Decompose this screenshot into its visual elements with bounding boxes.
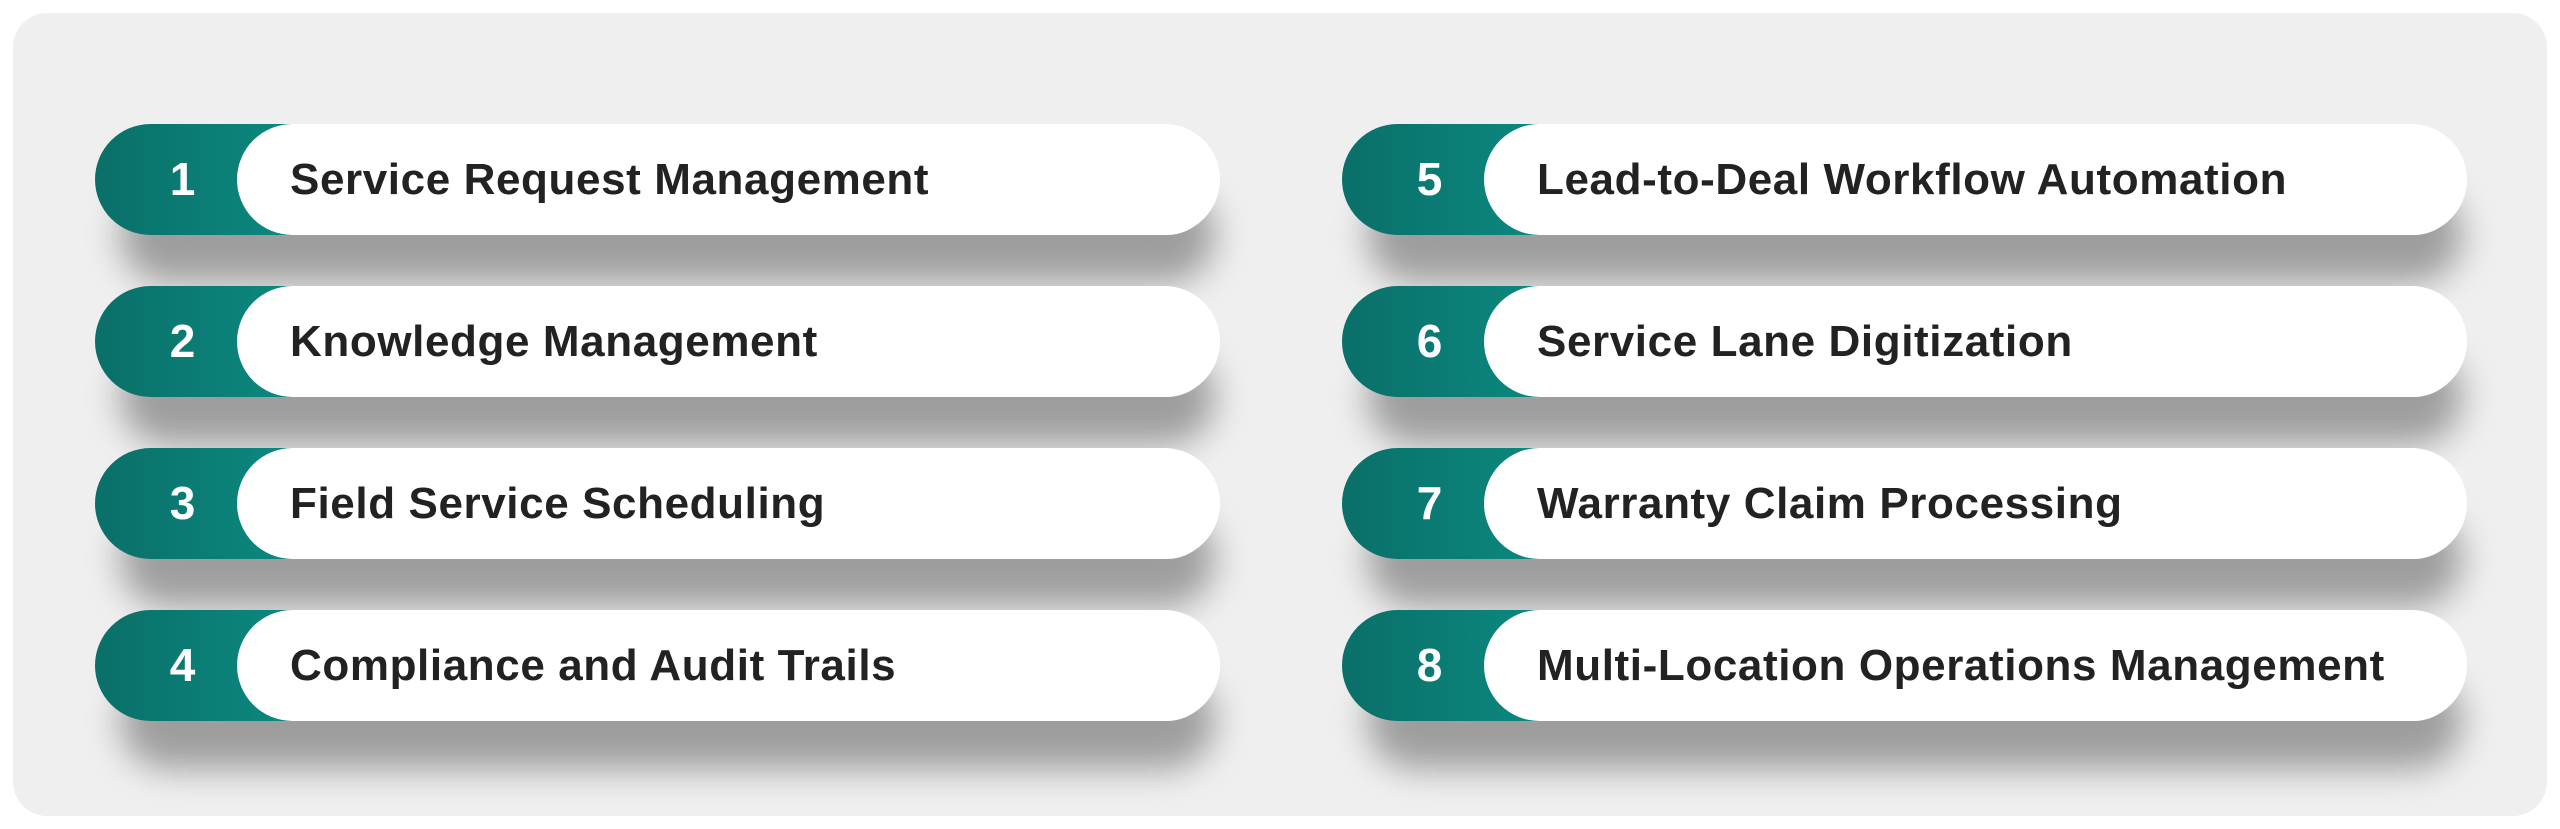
item 8: Multi-Location Operations Management <box>1537 641 2385 690</box>
item 5 <box>1342 124 2480 295</box>
item 7: Warranty Claim Processing <box>1537 479 2123 528</box>
item 7 <box>1342 448 2480 619</box>
item 5: 5 <box>1417 153 1442 205</box>
item 4: Compliance and Audit Trails <box>290 641 896 690</box>
item 1: Service Request Management <box>290 155 929 204</box>
item 6: 6 <box>1417 315 1442 367</box>
item 7: 7 <box>1417 477 1442 529</box>
item 6 <box>1342 286 2480 457</box>
item 2 <box>95 286 1234 457</box>
item 2: Knowledge Management <box>290 317 818 366</box>
item 3 <box>95 448 1234 619</box>
item 8: 8 <box>1417 639 1442 691</box>
item 2: 2 <box>170 315 195 367</box>
item 3: 3 <box>170 477 195 529</box>
item 6: Service Lane Digitization <box>1537 317 2073 366</box>
item 4: 4 <box>170 639 195 691</box>
item 8 <box>1342 610 2480 790</box>
item 3: Field Service Scheduling <box>290 479 825 528</box>
item 5: Lead-to-Deal Workflow Automation <box>1537 155 2287 204</box>
item 1 <box>95 124 1234 295</box>
item 4 <box>95 610 1234 790</box>
item 1: 1 <box>170 153 195 205</box>
